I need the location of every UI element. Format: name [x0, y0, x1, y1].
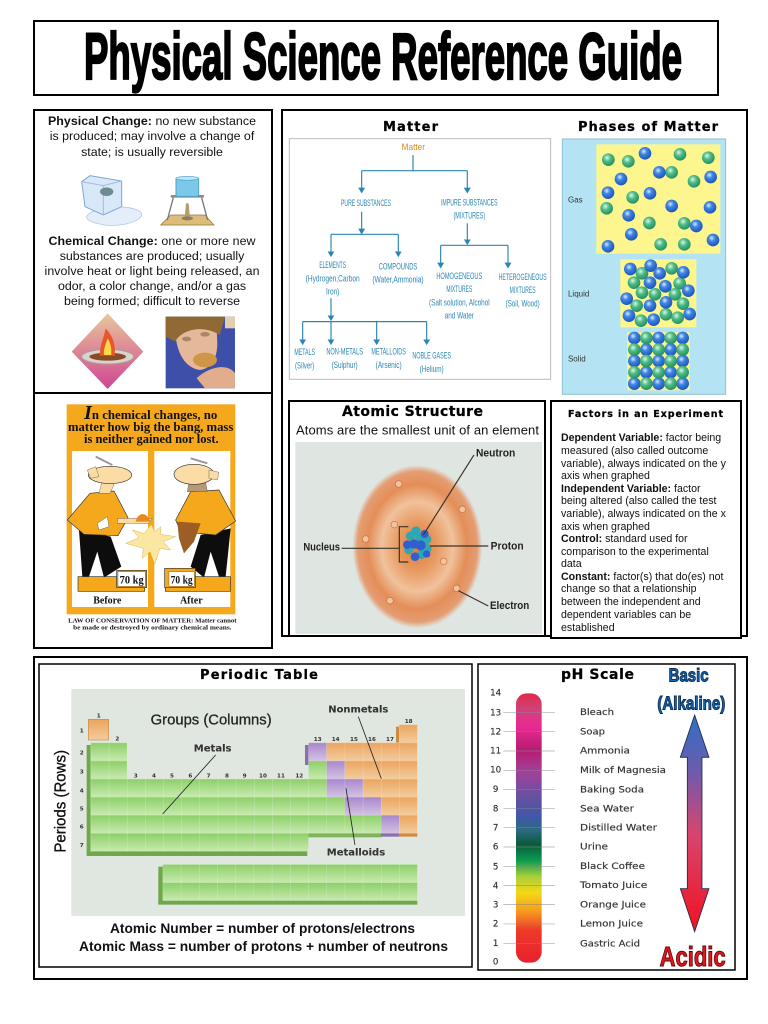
substance labels: Gastric Acid [580, 939, 640, 949]
icon: melting ice cube [82, 176, 142, 225]
text: atomic number and mass: Atomic Mass = number of protons + number of neutrons [79, 938, 448, 954]
chart: matter classification tree: ELEMENTS [319, 260, 346, 270]
substance labels: Tomato Juice [579, 881, 647, 891]
chart: matter classification tree: NOBLE GASES [412, 351, 451, 361]
scale numbers: 2 [493, 920, 498, 930]
chart: matter classification tree: (Soil, Wood) [506, 298, 540, 308]
text: variables and controls: established [561, 622, 615, 634]
panel: physical and chemical change [34, 110, 272, 393]
group numbers: 4 [152, 773, 156, 779]
caption: atoms: Atoms are the smallest unit of an element [296, 422, 539, 438]
scale numbers: 5 [493, 862, 498, 872]
scale numbers: 1 [493, 939, 498, 949]
group numbers: 18 [405, 719, 413, 725]
text: physical change definition: is produced; may involve a change of [50, 129, 255, 143]
labels: Electron [490, 600, 529, 612]
period numbers [80, 729, 84, 849]
label: periods: Periods (Rows) [53, 750, 70, 853]
chart: matter classification tree: (Salt solution, Alcohol [429, 297, 490, 307]
panel: conservation of mass cartoon [34, 393, 272, 648]
after panel [154, 451, 230, 607]
text: variables and controls: Dependent Variable: factor being [561, 432, 721, 444]
chart: matter classification tree: NON-METALS [326, 347, 363, 357]
group numbers: 3 [134, 773, 138, 779]
group numbers: 11 [277, 773, 285, 779]
phase labels: Liquid [568, 290, 589, 299]
text: chemical change definition: involve heat or light being released, an [44, 264, 260, 278]
figure: man after: 70 kg [171, 575, 193, 587]
scale numbers: 6 [493, 843, 498, 853]
text: physical change definition: state; is usually reversible [81, 145, 223, 159]
label: after: After [180, 596, 203, 607]
chart: matter classification tree: and Water [445, 311, 474, 321]
panel: bottom section [34, 657, 747, 979]
chart: matter classification tree: HOMOGENEOUS [436, 271, 482, 281]
text: variables and controls: axis when graphed [561, 470, 650, 482]
group numbers: 8 [225, 773, 229, 779]
label: nonmetals: Nonmetals [328, 705, 389, 716]
heading: atomic structure: Atomic Structure [342, 404, 483, 420]
nonmetals region [327, 725, 417, 833]
period numbers: 5 [80, 807, 84, 813]
scale numbers: 14 [490, 689, 502, 699]
law of conservation caption: be made or destroyed by ordinary chemical means. [73, 625, 232, 632]
substance labels: Sea Water [580, 804, 635, 814]
substance labels: Bleach [580, 708, 614, 718]
heading: matter: Matter [383, 120, 439, 135]
text: physical change definition: Physical Change: no new substance [48, 114, 256, 128]
text: variables and controls: between the independent and [561, 596, 701, 608]
labels: Proton [491, 541, 524, 553]
heading: factors: Factors in an Experiment [568, 409, 723, 420]
scale numbers [490, 689, 502, 968]
group numbers: 2 [115, 737, 119, 743]
text: variables and controls: comparison to the experimental [561, 546, 709, 558]
liquid box [620, 259, 696, 327]
group numbers: 5 [170, 773, 174, 779]
period numbers: 4 [80, 788, 84, 794]
substance labels: Orange Juice [580, 900, 646, 910]
group 1 cell [88, 719, 109, 740]
text: variables and controls: Independent Variable: factor [561, 483, 701, 495]
photo: boy eating [166, 317, 235, 388]
text: chemical change definition: odor, a color change, and/or a gas [58, 279, 246, 293]
text: variables and controls: axis when graphed [561, 521, 650, 533]
text: variables and controls: being altered (also called the test [561, 495, 717, 507]
scale numbers: 12 [490, 727, 501, 737]
group numbers [97, 713, 413, 779]
scale numbers: 13 [490, 708, 501, 718]
scale numbers: 8 [493, 804, 498, 814]
chart: matter classification tree: PURE SUBSTANCES [341, 198, 391, 208]
heading: phases of matter: Phases of Matter [578, 120, 719, 135]
substance labels: Ammonia [580, 747, 630, 757]
text: chemical change definition: being formed; difficult to reverse [64, 294, 240, 308]
heading: periodic table: Periodic Table [200, 668, 318, 683]
labels [303, 447, 529, 612]
label: metals: Metals [194, 743, 232, 754]
poster background [67, 404, 235, 614]
chart: matter classification tree: MIXTURES [446, 284, 472, 294]
group numbers: 13 [314, 737, 322, 743]
text: chemical change definition: substances are produced; usually [60, 249, 245, 263]
title banner [34, 19, 718, 95]
chart: matter classification tree: Matter [402, 142, 425, 152]
chart: matter classification tree: METALLOIDS [371, 346, 406, 356]
panel: atomic structure [289, 401, 545, 636]
chart: matter classification tree: (Silver) [295, 361, 314, 371]
label: basic: Basic [669, 665, 709, 686]
poster headline: In chemical changes, no [84, 402, 216, 424]
nucleus [403, 526, 432, 561]
chart: matter classification tree: (Arsenic) [376, 360, 402, 370]
arrow: acidic to basic [680, 715, 709, 932]
solid box [627, 332, 690, 390]
text: variables and controls: variable), always indicated on the x [561, 508, 727, 520]
chart: matter classification tree: (MIXTURES) [453, 210, 485, 220]
text: variables and controls: dependent variables can be [561, 609, 691, 621]
scale numbers: 10 [490, 766, 501, 776]
text: variables and controls: data [561, 558, 582, 570]
group numbers: 1 [97, 713, 101, 719]
scale numbers: 4 [493, 881, 499, 891]
group numbers: 12 [295, 773, 303, 779]
text: variables and controls: Constant: factor(s) that do(es) not [561, 571, 723, 583]
gas box [596, 144, 720, 254]
chart: matter classification tree: COMPOUNDS [379, 261, 417, 271]
labels: Neutron [476, 447, 515, 459]
poster headline: is neither gained nor lost. [84, 432, 219, 446]
text: atomic number and mass: Atomic Number = number of protons/electrons [110, 920, 415, 936]
metalloids region [308, 743, 399, 833]
scale numbers: 9 [493, 785, 498, 795]
leader lines [163, 717, 381, 845]
panel: pH scale [478, 664, 735, 972]
text: variables and controls: change so that a relationship [561, 583, 697, 595]
period numbers: 1 [80, 729, 84, 735]
electrons [362, 481, 466, 604]
icon: beaker on burner [161, 176, 214, 225]
substance labels: Distilled Water [580, 824, 658, 834]
text: chemical change definition: Chemical Change: one or more new [48, 234, 256, 248]
chart: periodic table [53, 689, 465, 916]
panel: factors in an experiment [551, 401, 741, 638]
group numbers: 14 [332, 737, 340, 743]
substance labels: Lemon Juice [580, 920, 643, 930]
scale numbers: 7 [493, 823, 498, 833]
period numbers: 6 [80, 825, 84, 831]
label: metalloids: Metalloids [327, 847, 386, 858]
group numbers: 10 [259, 773, 267, 779]
text: variables and controls: measured (also called outcome [561, 445, 708, 457]
labels: Nucleus [303, 542, 340, 554]
chart: matter classification tree: MIXTURES [510, 285, 536, 295]
group numbers: 7 [207, 773, 211, 779]
figure: man before [67, 457, 152, 591]
substance labels [579, 708, 666, 949]
phase labels: Gas [568, 195, 583, 204]
text: variables and controls: variable), always indicated on the y [561, 458, 727, 470]
label: before: Before [93, 596, 122, 607]
law of conservation caption: LAW OF CONSERVATION OF MATTER: Matter cannot [68, 618, 237, 625]
heading: pH scale: pH Scale [561, 667, 634, 683]
period numbers: 7 [80, 843, 84, 849]
substance labels: Soap [580, 727, 606, 737]
figure: man after [165, 458, 236, 591]
chart: matter classification tree: Iron) [326, 286, 339, 296]
scale numbers: 11 [490, 747, 501, 757]
period numbers: 2 [80, 751, 84, 757]
chart: matter classification tree [289, 139, 551, 379]
substance labels: Black Coffee [580, 862, 645, 872]
before panel [72, 451, 148, 607]
chart: matter classification tree: (Hydrogen,Carbon [306, 273, 360, 283]
chart: matter classification tree: METALS [294, 347, 315, 357]
label: alkaline: (Alkaline) [657, 693, 725, 714]
phase labels: Solid [568, 354, 586, 363]
panel: matter and atoms section [282, 110, 747, 636]
group numbers: 15 [350, 737, 358, 743]
group numbers: 16 [368, 737, 376, 743]
icon: campfire [72, 313, 143, 389]
substance labels: Baking Soda [580, 785, 644, 795]
diagram: phases of matter [562, 139, 726, 394]
scale numbers: 0 [493, 958, 498, 968]
leader lines [342, 455, 488, 606]
period numbers: 3 [80, 770, 84, 776]
text: variables and controls: Control: standard used for [561, 533, 688, 545]
chart: matter classification tree: (Water,Ammonia) [372, 275, 424, 285]
metals region [91, 743, 381, 851]
group numbers: 6 [188, 773, 192, 779]
poster headline: matter how big the bang, mass [68, 420, 233, 434]
chart: matter classification tree: (Sulphur) [332, 360, 358, 370]
substance labels: Milk of Magnesia [580, 766, 666, 776]
diagram: atom [295, 442, 542, 634]
chart: matter classification tree: (Helium) [420, 364, 444, 374]
group numbers: 9 [243, 773, 247, 779]
chart: matter classification tree: IMPURE SUBSTANCES [441, 197, 498, 207]
group numbers: 17 [386, 737, 394, 743]
lanthanide and actinide rows [158, 864, 417, 905]
tick marks [503, 713, 555, 943]
icon: bang starburst [126, 524, 176, 564]
chart: matter classification tree: HETEROGENEOUS [499, 272, 547, 282]
scale numbers: 3 [493, 900, 498, 910]
label: groups: Groups (Columns) [151, 712, 272, 728]
substance labels: Urine [580, 843, 608, 853]
panel: periodic table [39, 664, 472, 967]
pH colour bar [516, 693, 542, 963]
label: acidic: Acidic [660, 941, 726, 972]
figure: man before: 70 kg [120, 575, 144, 587]
